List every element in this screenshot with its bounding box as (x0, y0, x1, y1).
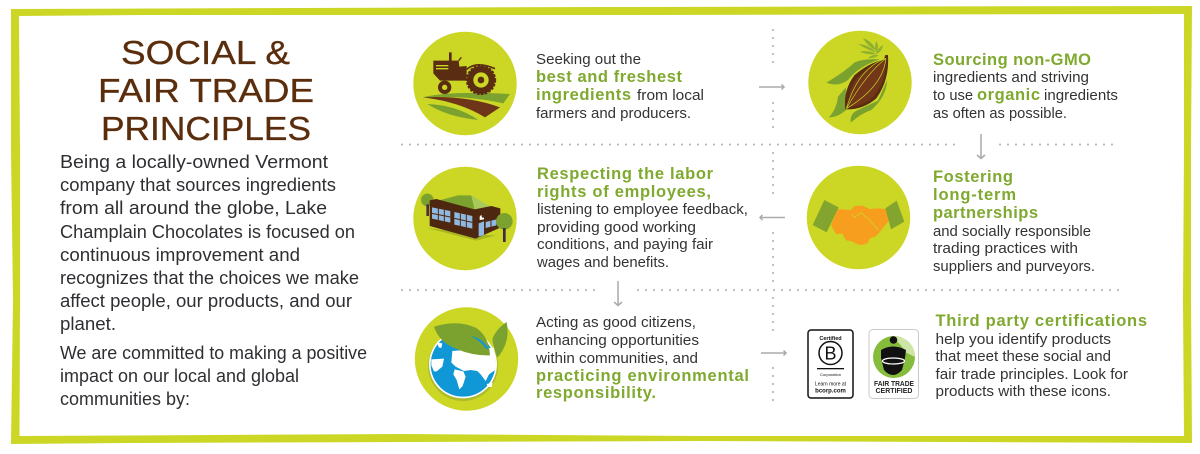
text: long-term partnerships: partnerships (933, 204, 1038, 222)
intro text block: affect people, our products, and our (60, 290, 352, 311)
text: sourcing non-GMO: to use (933, 88, 973, 104)
text: labor rights: wages and benefits. (536, 255, 669, 271)
text: long-term partnerships: and socially responsible (933, 224, 1091, 240)
text: sourcing non-GMO: ingredients (1044, 88, 1118, 104)
text: best and freshest ingredients: from local (637, 88, 704, 104)
intro text block: We are committed to making a positive (60, 342, 367, 363)
text: long-term partnerships: suppliers and purveyors. (933, 259, 1095, 275)
title (98, 35, 314, 148)
title: PRINCIPLES (101, 111, 311, 148)
intro text block: planet. (60, 313, 116, 334)
intro text block: company that sources ingredients (60, 174, 336, 195)
text: third party certifications: Third party certifications (936, 312, 1147, 330)
icon: globe with leaves (415, 307, 518, 411)
icon: B Corp badge: Learn more at (815, 382, 847, 388)
text: environmental responsibility: Acting as good citizens, (536, 315, 696, 331)
icon: B Corp badge: bcorp.com (815, 388, 846, 394)
icon: handshake (807, 166, 910, 269)
text: sourcing non-GMO: organic (977, 86, 1040, 104)
arrow: step 1 to 2 (759, 84, 784, 90)
title: FAIR TRADE (98, 73, 314, 110)
arrow: step 5 to 6 (761, 350, 786, 356)
text: third party certifications: that meet these social and (936, 349, 1111, 365)
text: sourcing non-GMO: ingredients and striving (933, 70, 1089, 86)
intro text block: continuous improvement and (60, 244, 300, 265)
icon: cocoa pod (808, 31, 912, 134)
intro text block: Being a locally-owned Vermont (60, 151, 328, 172)
text: labor rights: conditions, and paying fair (537, 237, 713, 253)
intro text block: recognizes that the choices we make (60, 267, 359, 288)
text: long-term partnerships: trading practices with (933, 241, 1078, 257)
intro text block: Champlain Chocolates is focused on (60, 221, 355, 242)
text: third party certifications: products with these icons. (936, 384, 1111, 400)
text: best and freshest ingredients: ingredients (536, 86, 631, 104)
arrow: step 3 to 4 (760, 215, 785, 220)
intro text block (60, 151, 367, 409)
text: sourcing non-GMO: Sourcing non-GMO (933, 51, 1091, 69)
text: sourcing non-GMO: as often as possible. (933, 106, 1067, 122)
intro text block: communities by: (60, 388, 190, 409)
arrow: step 4 to 5 (614, 281, 622, 306)
text: third party certifications (936, 312, 1147, 400)
icon: building (413, 167, 517, 270)
text: best and freshest ingredients: farmers and producers. (536, 106, 691, 122)
icon: Fair Trade Certified badge (869, 330, 918, 398)
text: environmental responsibility: enhancing opportunities (536, 333, 699, 349)
icon: B Corp badge: B (824, 344, 837, 364)
title: SOCIAL & (121, 35, 290, 72)
icon: Fair Trade Certified badge: FAIR TRADE (874, 381, 914, 388)
text: environmental responsibility: responsibility. (536, 384, 656, 402)
icon: Fair Trade Certified badge: CERTIFIED (876, 388, 912, 395)
icon: B Corp badge (808, 330, 853, 398)
text: labor rights: Respecting the labor (537, 165, 714, 183)
text: labor rights: providing good working (537, 220, 696, 236)
intro text block: impact on our local and global (60, 365, 299, 386)
text: sourcing non-GMO (933, 51, 1118, 122)
text: labor rights: listening to employee feedback, (537, 202, 748, 218)
text: environmental responsibility: practicing environmental (536, 367, 749, 385)
text: best and freshest ingredients: Seeking out the (536, 52, 641, 68)
text: best and freshest ingredients: best and freshest (536, 68, 682, 86)
text: environmental responsibility: within communities, and (535, 351, 698, 367)
text: environmental responsibility (535, 315, 749, 402)
text: long-term partnerships: Fostering (933, 168, 1013, 186)
text: long-term partnerships: long-term (933, 186, 1016, 204)
text: long-term partnerships (933, 168, 1095, 275)
icon: B Corp badge: Certified (819, 336, 842, 342)
text: labor rights (536, 165, 748, 271)
intro text block: from all around the globe, Lake (60, 197, 327, 218)
arrow: step 2 to 3 (977, 134, 985, 158)
text: labor rights: rights of employees, (537, 183, 711, 201)
icon: tractor (413, 32, 517, 135)
text: third party certifications: help you identify products (936, 332, 1111, 348)
text: third party certifications: fair trade principles. Look for (936, 367, 1128, 383)
icon: B Corp badge: Corporation (820, 372, 841, 377)
text: best and freshest ingredients (536, 52, 704, 122)
